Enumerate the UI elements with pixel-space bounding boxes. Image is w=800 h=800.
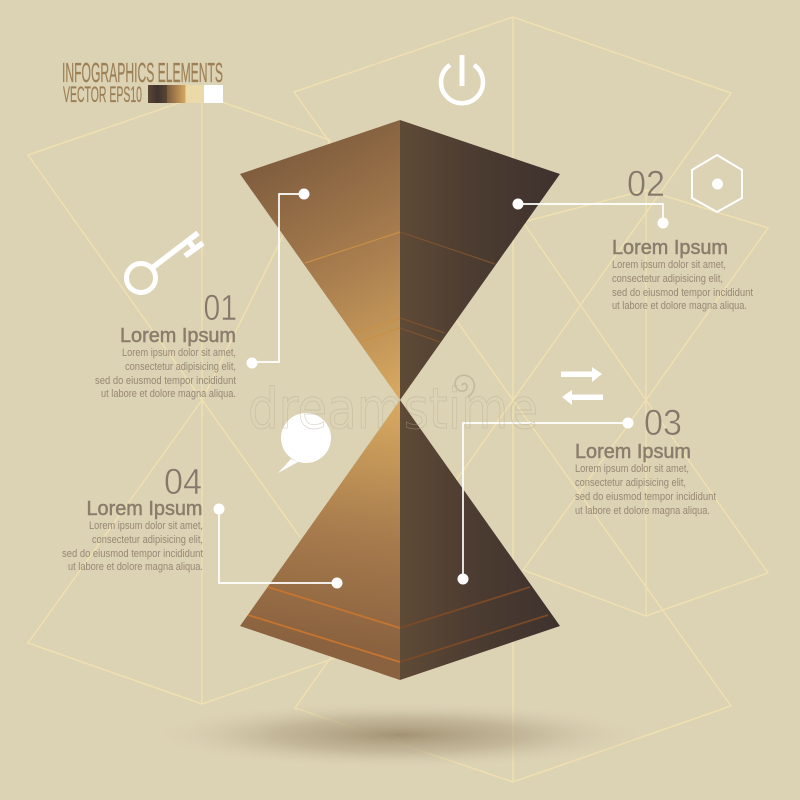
callout 01 xyxy=(95,188,310,400)
connector 01 xyxy=(246,188,310,368)
body 01: sed do eiusmod tempor incididunt xyxy=(95,375,236,387)
heading 04: Lorem Ipsum xyxy=(86,498,202,520)
callout 04 xyxy=(62,461,342,588)
body 01: consectetur adipisicing elit, xyxy=(125,361,236,373)
number 01: 01 xyxy=(204,287,237,328)
number 02: 02 xyxy=(627,163,665,204)
icon: exchange arrows xyxy=(561,367,603,405)
body 01: Lorem ipsum dolor sit amet, xyxy=(122,347,236,359)
connector 03 xyxy=(458,418,634,584)
number 03: 03 xyxy=(644,402,682,443)
body 02: Lorem ipsum dolor sit amet, xyxy=(612,259,726,271)
heading 01: Lorem Ipsum xyxy=(120,325,236,347)
callout 02 xyxy=(512,163,753,312)
connector 02 xyxy=(512,198,668,228)
body 01: ut labore et dolore magna aliqua. xyxy=(101,388,236,400)
number 04: 04 xyxy=(164,461,202,502)
header xyxy=(62,57,223,107)
connector 04 xyxy=(214,504,342,588)
heading 03: Lorem Ipsum xyxy=(575,441,691,463)
watermark: dreamstime xyxy=(248,377,538,442)
body 04: sed do eiusmod tempor incididunt xyxy=(62,548,203,560)
body 02: ut labore et dolore magna aliqua. xyxy=(612,300,747,312)
floor shadow xyxy=(145,701,655,769)
body 04: ut labore et dolore magna aliqua. xyxy=(68,561,203,573)
top pyramid left face xyxy=(240,120,400,400)
body 02: consectetur adipisicing elit, xyxy=(612,273,723,285)
body 03: ut labore et dolore magna aliqua. xyxy=(575,505,710,517)
body 02: sed do eiusmod tempor incididunt xyxy=(612,287,753,299)
body 03: Lorem ipsum dolor sit amet, xyxy=(575,463,689,475)
bottom pyramid left face xyxy=(240,400,400,680)
body 04: Lorem ipsum dolor sit amet, xyxy=(89,520,203,532)
hourglass xyxy=(240,120,560,680)
bottom pyramid right face xyxy=(400,400,560,680)
body 04: consectetur adipisicing elit, xyxy=(92,534,203,546)
band lines xyxy=(248,232,548,662)
body 02 xyxy=(612,259,753,312)
infographic canvas: INFOGRAPHICS ELEMENTS xyxy=(62,57,223,88)
body 04 xyxy=(62,520,203,573)
colour swatches xyxy=(148,85,223,103)
icon: speech bubble xyxy=(278,413,331,473)
icon: key xyxy=(126,233,203,292)
header: VECTOR EPS10 xyxy=(63,82,142,107)
body 01 xyxy=(95,347,236,400)
icon: hexagon xyxy=(692,155,742,212)
heading 02: Lorem Ipsum xyxy=(612,237,728,259)
body 03: sed do eiusmod tempor incididunt xyxy=(575,491,716,503)
top pyramid right face xyxy=(400,120,560,400)
body 03 xyxy=(575,463,716,517)
icon: power xyxy=(441,55,483,103)
callout 03 xyxy=(458,402,716,584)
body 03: consectetur adipisicing elit, xyxy=(575,477,686,489)
